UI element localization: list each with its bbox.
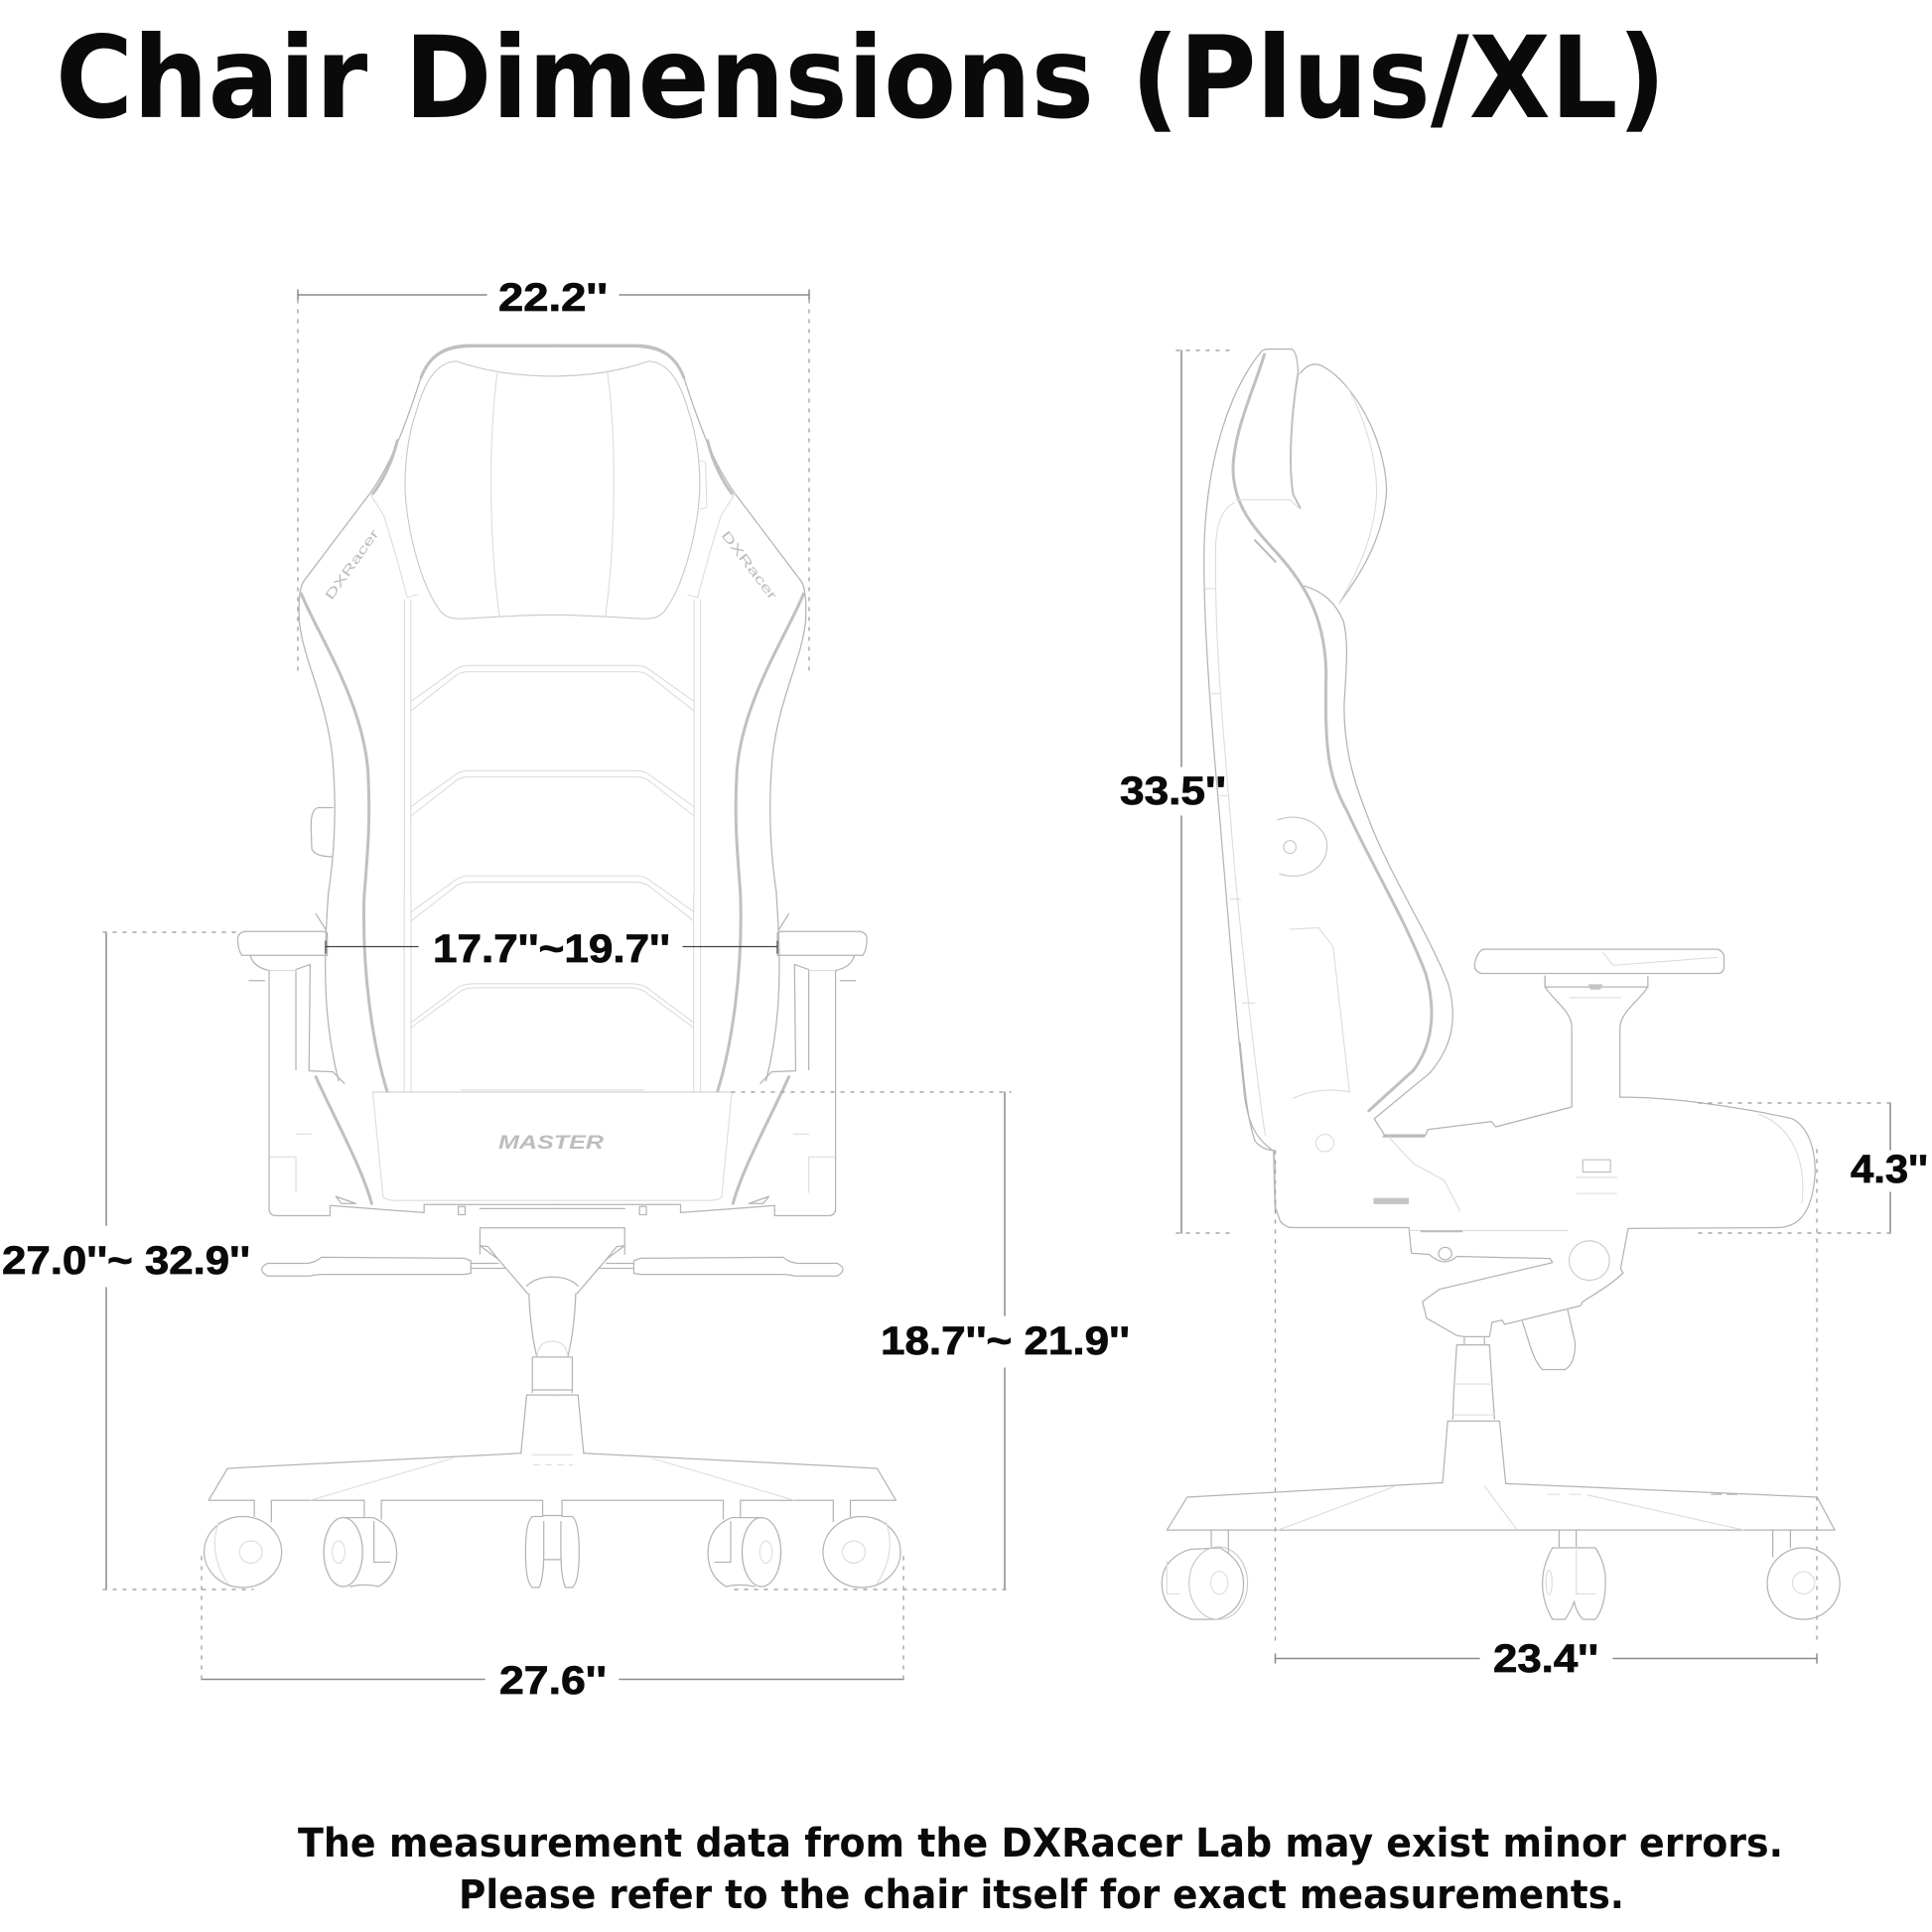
side seat, mechanism and base bbox=[1162, 1042, 1840, 1619]
footnote: The measurement data from the DXRacer Lab may exist minor errors. bbox=[298, 1821, 1783, 1866]
seat logo: MASTER bbox=[498, 1133, 604, 1154]
dimension: base width 27.6: 27.6'' bbox=[499, 1659, 607, 1703]
side view chair bbox=[1162, 349, 1840, 1619]
shoulder logo right: DXRacer bbox=[719, 528, 781, 604]
footnote bbox=[298, 1821, 1783, 1918]
front seat, armrests and base bbox=[205, 894, 900, 1587]
dimension: inner seat width 17.7 to 19.7: 17.7''~19.7'' bbox=[433, 927, 670, 971]
dimension: seat height 18.7 to 21.9: 18.7''~ 21.9'' bbox=[881, 1319, 1130, 1363]
shoulder logo left: DXRacer bbox=[322, 526, 382, 603]
side backrest and headrest bbox=[1204, 349, 1725, 1172]
footnote: Please refer to the chair itself for exact measurements. bbox=[459, 1872, 1624, 1918]
dimension: backrest height 33.5: 33.5'' bbox=[1120, 769, 1226, 813]
dimension: seat thickness 4.3: 4.3'' bbox=[1851, 1148, 1928, 1191]
dimension: backrest width 22.2: 22.2'' bbox=[498, 276, 608, 320]
front backrest bbox=[299, 345, 806, 921]
title: Chair Dimensions (Plus/XL) bbox=[56, 12, 1666, 144]
front view chair bbox=[205, 345, 900, 1587]
dimension: seat depth 23.4: 23.4'' bbox=[1493, 1637, 1598, 1681]
dimension: armrest height 27.0 to 32.9: 27.0''~ 32.9'' bbox=[2, 1239, 250, 1283]
